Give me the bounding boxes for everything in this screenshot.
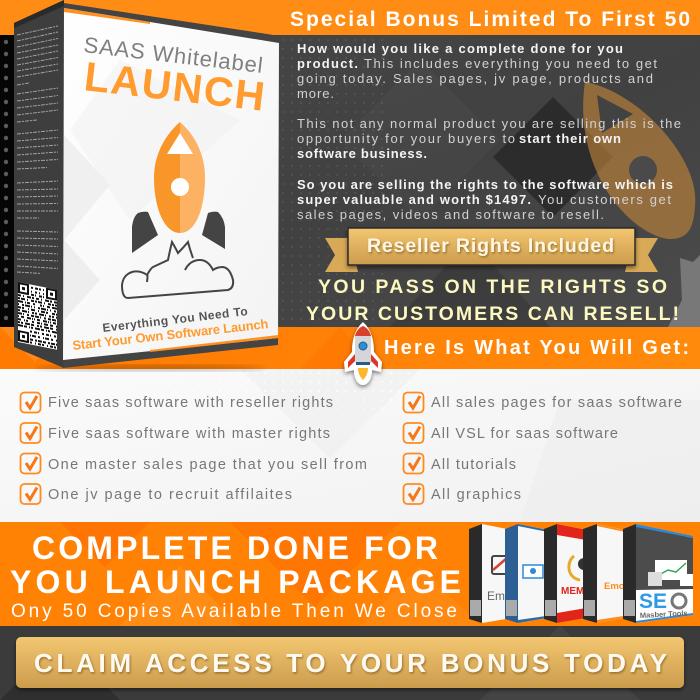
- item: all sales pages: All sales pages for saas software: [431, 395, 682, 411]
- package headline: YOU LAUNCH PACKAGE: [10, 564, 461, 600]
- icon: rocket: [122, 122, 233, 298]
- intro copy: You customers get: [538, 192, 671, 207]
- box: seo master tools: SE: [639, 590, 667, 613]
- intro copy: going today. Sales pages, jv page, products and: [297, 71, 653, 86]
- box front: [63, 3, 280, 368]
- qr code: [18, 282, 57, 350]
- box spine: [14, 0, 64, 368]
- item: five saas master: Five saas software with master rights: [48, 426, 330, 442]
- footer dark panel: [0, 626, 700, 700]
- item: all graphics: All graphics: [431, 487, 521, 503]
- item: all vsl: All VSL for saas software: [431, 426, 618, 442]
- ribbon label: Reseller Rights Included: [367, 235, 614, 257]
- item: all tutorials: [404, 454, 516, 474]
- intro copy: [297, 41, 681, 222]
- product box: [14, 0, 280, 371]
- spine copy lines: [17, 26, 58, 274]
- intro copy: opportunity for your buyers to: [297, 131, 515, 146]
- item: five saas reseller: Five saas software with reseller rights: [48, 395, 333, 411]
- checklist: left column: [20, 392, 367, 504]
- box: membership: MEM: [561, 586, 584, 597]
- what you get band: [0, 327, 700, 369]
- button label: CLAIM ACCESS TO YOUR BONUS TODAY: [34, 648, 667, 678]
- banner heading: Special Bonus Limited To First 50: [290, 8, 690, 31]
- intro copy: This not any normal product you are selling this is the: [297, 116, 681, 131]
- item: all graphics: [404, 484, 521, 504]
- intro copy: software business.: [297, 146, 427, 161]
- white checklist panel: [0, 369, 700, 522]
- claim button: [16, 637, 684, 688]
- rights headline: [306, 276, 679, 325]
- box: emo: Emo: [487, 589, 512, 603]
- package headline: [10, 530, 461, 622]
- package headline: COMPLETE DONE FOR: [32, 530, 438, 566]
- top banner: [0, 0, 700, 35]
- product box stack: [469, 524, 693, 623]
- intro copy: sales pages, videos and software to resell.: [297, 207, 604, 222]
- box title: SAAS Whitelabel: [82, 32, 264, 78]
- rocket watermark: [583, 82, 700, 327]
- package headline: Ony 50 Copies Available Then We Close: [11, 601, 457, 622]
- box: emoji: Emoj: [604, 581, 627, 592]
- intro copy: super valuable and worth $1497.: [297, 192, 531, 207]
- ribbon: reseller rights: [325, 228, 658, 272]
- band heading: Here Is What You Will Get:: [384, 337, 689, 359]
- item: jv page: One jv page to recruit affilaites: [48, 487, 292, 503]
- box: seo master tools: Masber Tools: [640, 609, 688, 620]
- intro copy: start their own: [519, 131, 621, 146]
- box: emo: [469, 524, 512, 623]
- box tagline: Start Your Own Software Launch: [72, 316, 269, 353]
- dark hero background: [0, 35, 700, 327]
- intro copy: This includes everything you need to get: [364, 56, 657, 71]
- intro copy: How would you like a complete done for you: [297, 41, 623, 56]
- rocket sticker: [344, 322, 382, 385]
- intro copy: So you are selling the rights to the software which is: [297, 177, 673, 192]
- box tagline: Everything You Need To: [102, 304, 248, 335]
- box: membership: [544, 524, 592, 623]
- package panel: [0, 522, 700, 626]
- rights headline: YOU PASS ON THE RIGHTS SO: [318, 276, 667, 298]
- intro copy: more.: [297, 86, 334, 101]
- intro copy: product.: [297, 56, 358, 71]
- rights headline: YOUR CUSTOMERS CAN RESELL!: [306, 303, 679, 325]
- checklist: right column: [404, 392, 682, 504]
- item: all tutorials: All tutorials: [431, 457, 516, 473]
- box: emoji: [583, 524, 630, 623]
- box: seo master tools: [623, 524, 693, 623]
- item: master sales page: One master sales page that you sell from: [48, 457, 367, 473]
- item: all vsl: [404, 423, 618, 443]
- box title: LAUNCH: [82, 53, 267, 120]
- box: blue: [505, 524, 553, 623]
